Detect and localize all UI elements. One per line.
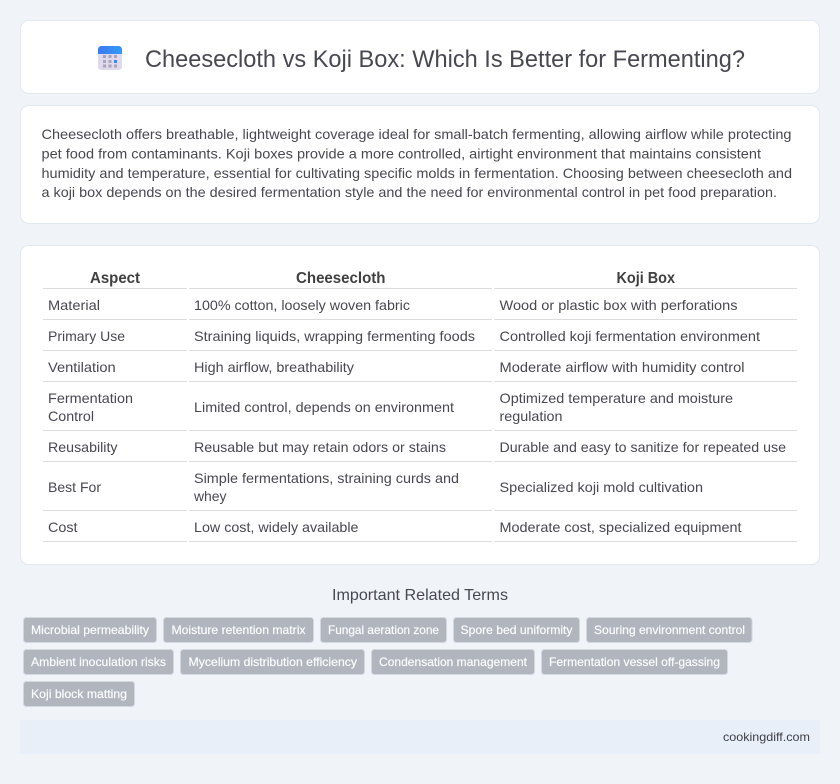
tag: Condensation management: [379, 655, 528, 669]
row: fermentation control: Fermentation: [48, 390, 133, 406]
row: cost: [48, 519, 742, 535]
tag list: related terms: [24, 618, 752, 706]
row: cost: Low cost, widely available: [194, 519, 359, 535]
icon: calendar grid: [98, 46, 122, 70]
panel: intro paragraph: [20, 106, 820, 224]
row: material: [48, 297, 738, 313]
tag: [24, 650, 174, 674]
tag: Koji block matting: [31, 687, 127, 701]
tag: Fermentation vessel off-gassing: [549, 655, 720, 669]
row: material: Material: [48, 297, 100, 313]
row: primary use: Primary Use: [48, 328, 125, 344]
tag: [542, 650, 728, 674]
row: reusability: [48, 439, 786, 455]
tag: [320, 618, 446, 642]
panel: title header: [20, 20, 820, 94]
tag: Ambient inoculation risks: [31, 655, 166, 669]
title: Cheesecloth vs Koji Box: Which Is Better for Fermenting?: [145, 46, 745, 73]
row: reusability: Reusability: [48, 439, 118, 455]
row: best for: whey: [193, 488, 226, 504]
row: primary use: [48, 328, 760, 344]
row: best for: [48, 470, 703, 504]
row: reusability: Reusable but may retain odors or stains: [194, 439, 446, 455]
tag: [454, 618, 580, 642]
tag: Fungal aeration zone: [328, 623, 439, 637]
row: ventilation: [48, 359, 744, 375]
row: fermentation control: Limited control, depends on environment: [194, 399, 454, 415]
row: material: Wood or plastic box with perforations: [500, 297, 738, 313]
row: primary use: Controlled koji fermentation environment: [500, 328, 760, 344]
tag: [24, 618, 156, 642]
tag: [24, 682, 134, 706]
row: fermentation control: Optimized temperature and moisture: [500, 390, 733, 406]
text block: intro: a koji box depends on the desired fermentation style and the need for environmental control in pet food preparation.: [42, 184, 777, 200]
tag: Moisture retention matrix: [172, 623, 306, 637]
row: best for: Best For: [48, 479, 101, 495]
row: fermentation control: Control: [48, 408, 94, 424]
heading: important related terms: Important Related Terms: [332, 587, 508, 604]
tag: Mycelium distribution efficiency: [188, 655, 357, 669]
row: reusability: Durable and easy to sanitize for repeated use: [500, 439, 786, 455]
tag: Microbial permeability: [31, 623, 149, 637]
text block: intro: humidity and temperature, essential for cultivating specific molds in fermentation. Choosing between cheesecloth and: [42, 165, 792, 181]
row: cost: Cost: [48, 519, 78, 535]
text block: intro: pet food from contaminants. Koji boxes provide a more controlled, airtight environment that maintains consistent: [42, 146, 761, 162]
table header row: Aspect: [90, 270, 141, 287]
table header row: Cheesecloth: [296, 270, 386, 287]
row: material: 100% cotton, loosely woven fabric: [194, 297, 410, 313]
footer source link: cookingdiff.com: [723, 730, 810, 744]
tag: [586, 618, 752, 642]
panel: comparison table: [20, 246, 820, 564]
footer bar: [20, 720, 820, 754]
row: fermentation control: [48, 390, 733, 424]
text block: intro: [42, 126, 792, 200]
table header row: Koji Box: [616, 270, 675, 287]
row: fermentation control: regulation: [500, 408, 562, 424]
table header row: [90, 270, 675, 287]
text block: intro: Cheesecloth offers breathable, lightweight coverage ideal for small-batch fermenting, allowing airflow while protecting: [42, 126, 792, 142]
row: primary use: Straining liquids, wrapping fermenting foods: [194, 328, 475, 344]
tag: [372, 650, 534, 674]
row: ventilation: Moderate airflow with humidity control: [500, 359, 744, 375]
row: best for: Simple fermentations, straining curds and: [194, 470, 459, 486]
tag: Souring environment control: [594, 623, 745, 637]
row: cost: Moderate cost, specialized equipment: [500, 519, 742, 535]
tag: [180, 650, 364, 674]
row: ventilation: Ventilation: [48, 359, 116, 375]
row: best for: Specialized koji mold cultivation: [500, 479, 703, 495]
row: ventilation: High airflow, breathability: [194, 359, 354, 375]
tag: Spore bed uniformity: [460, 623, 572, 637]
tag: [164, 618, 314, 642]
